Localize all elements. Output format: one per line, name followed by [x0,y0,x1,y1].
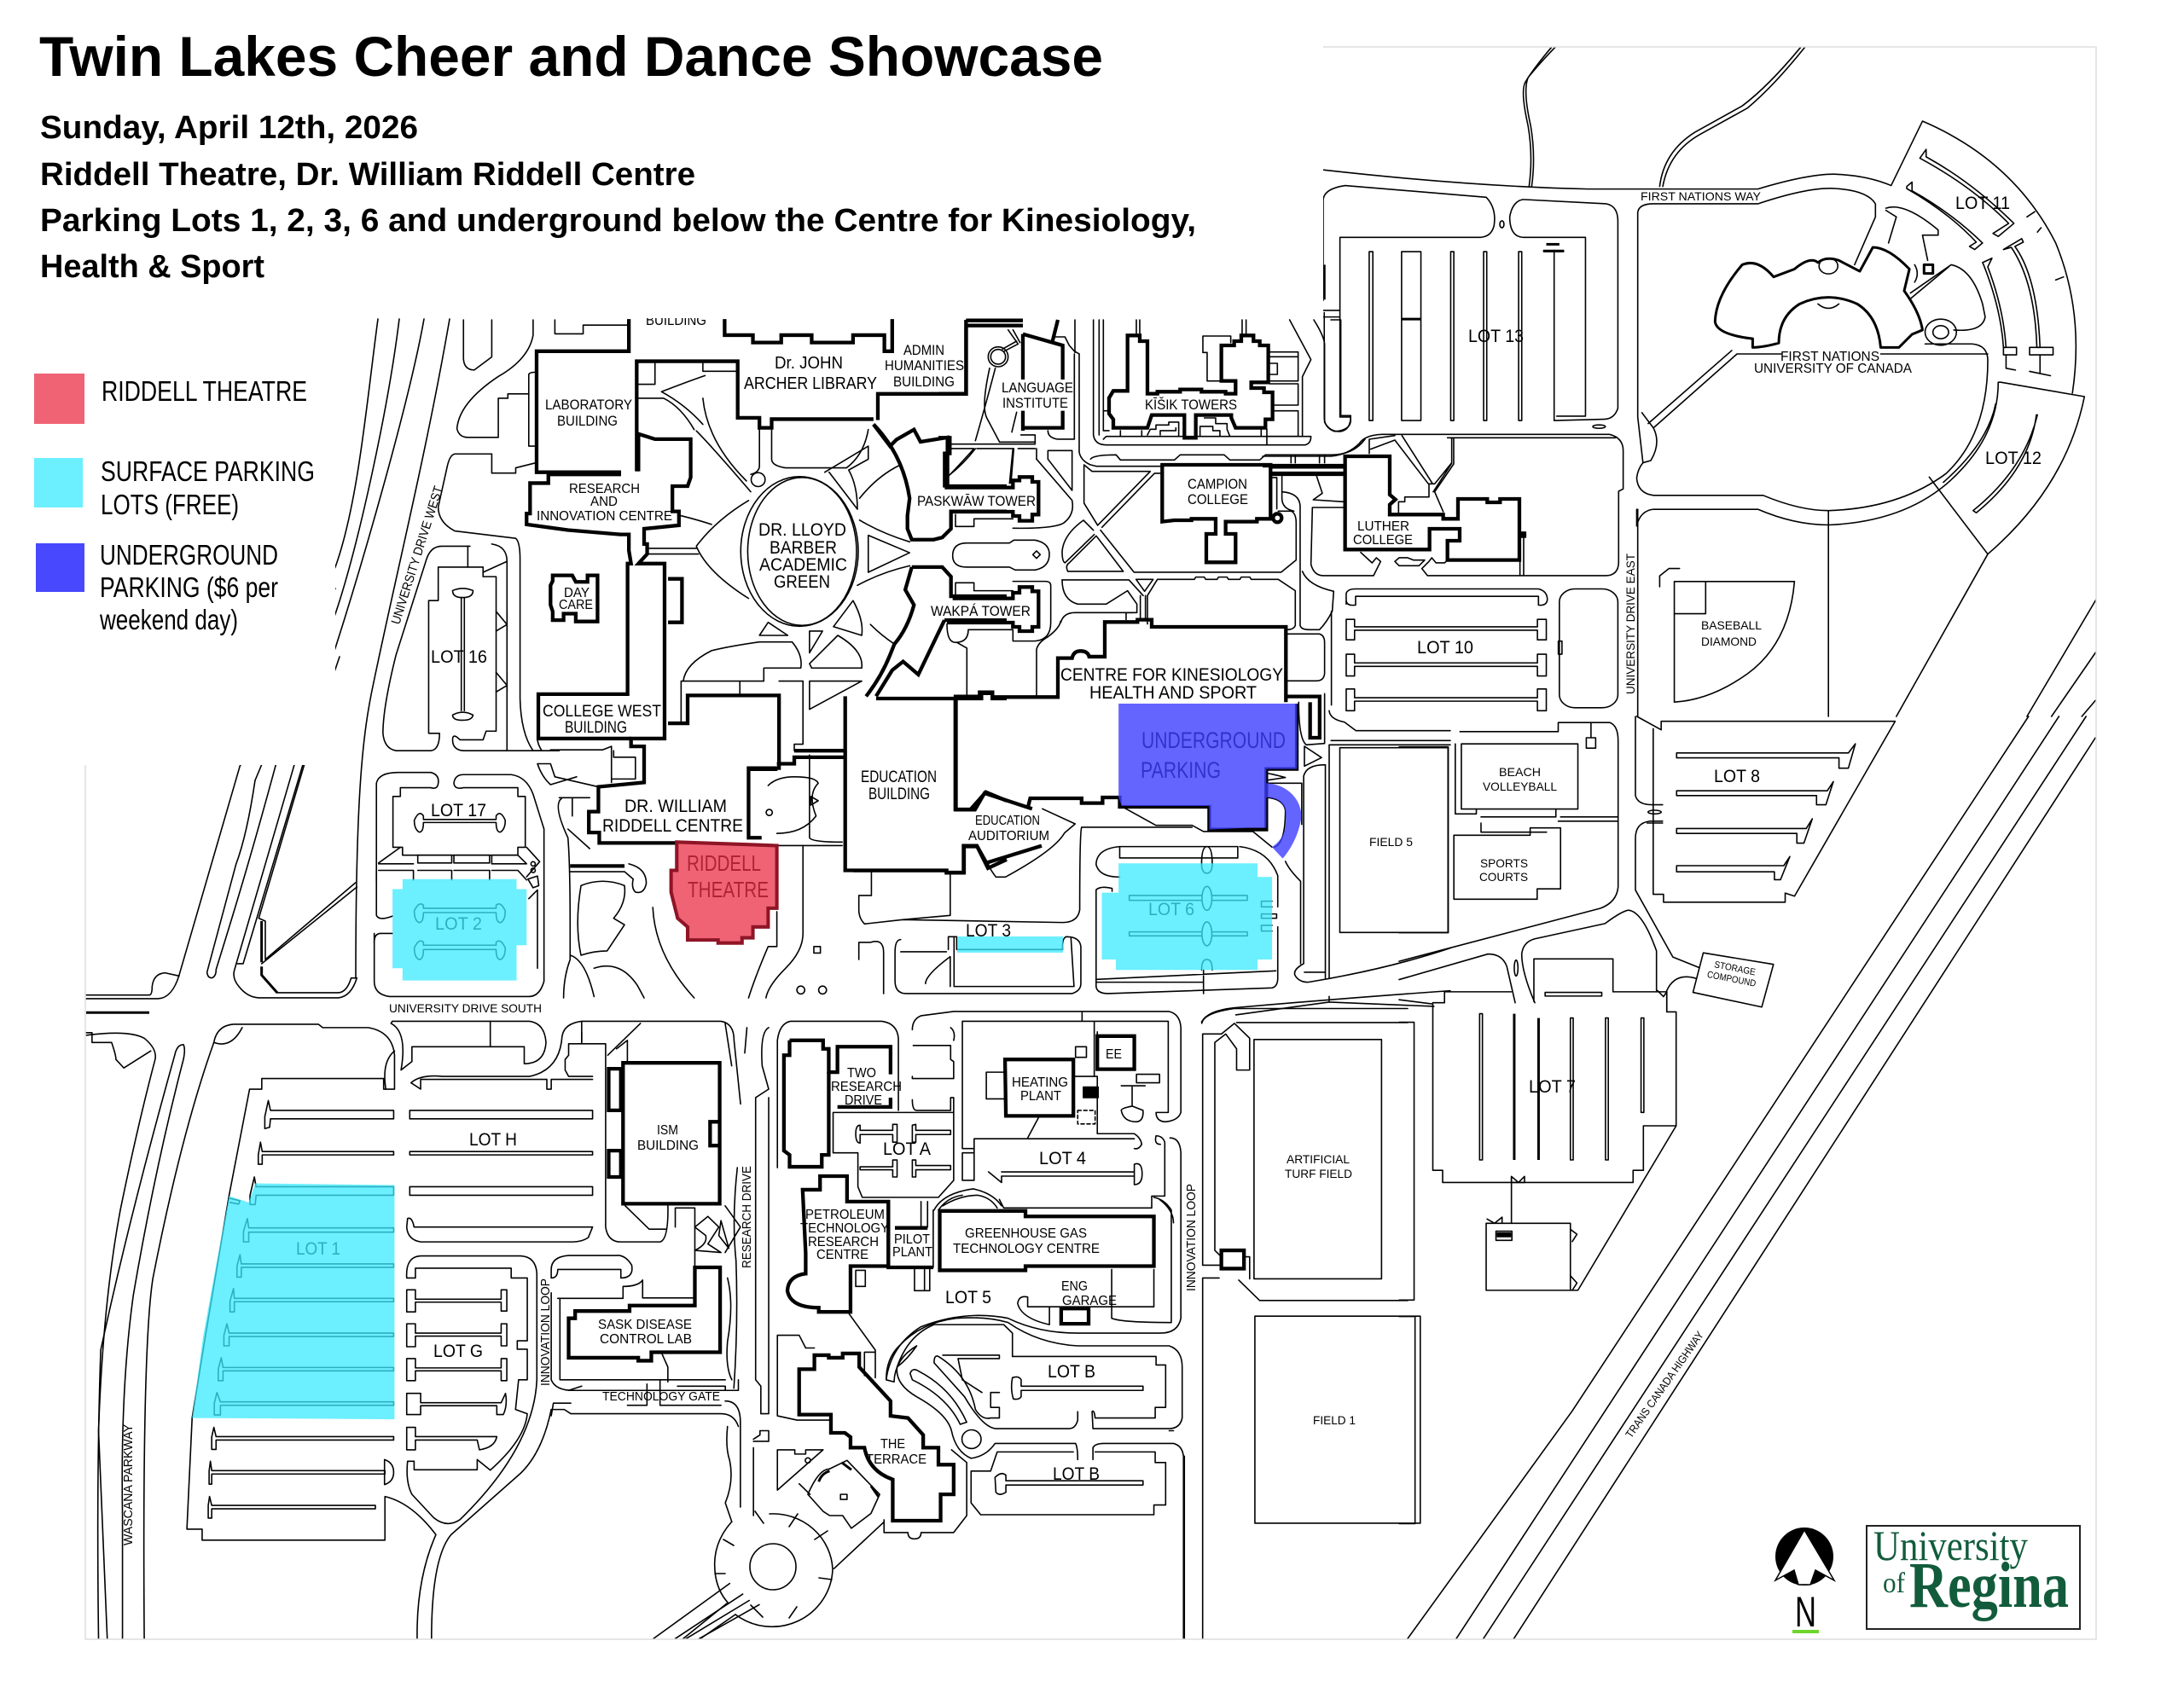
label: Greenhouse Gas Technology Centre: TECHNOLOGY CENTRE [953,1242,1100,1256]
Lot B north [886,1318,1182,1459]
label: Admin Humanities Building: BUILDING [893,374,955,390]
label: Pilot Plant: PLANT [892,1245,932,1260]
Lot 13 [1323,186,1495,432]
Lot 12 [1929,382,2084,554]
Two Research Drive [790,1041,891,1107]
label: Admin Humanities Building: HUMANITIES [885,357,964,374]
Lot 11 [1920,149,2014,236]
label: Trans Canada Highway: TRANS CANADA HIGHWAY [1623,1329,1706,1441]
Lot 17 and Lot 2 roads [375,773,544,996]
label: Eng Garage: GARAGE [1062,1294,1117,1308]
label: Language Institute: LANGUAGE [1002,380,1073,396]
label: College West Building: BUILDING [565,719,627,737]
label: Lot B north: LOT B [1048,1362,1095,1382]
label: Lot 6: LOT 6 [1148,900,1194,919]
legend: surface parking: LOTS (FREE) [101,489,239,520]
label: Lot 1: LOT 1 [296,1239,340,1259]
label: Education Building: BUILDING [868,786,930,803]
Lot A [834,1046,954,1197]
Paskwaw Tower [944,477,1038,521]
label: Lot G: LOT G [433,1342,483,1361]
label: Research and Innovation Centre: AND [590,495,618,509]
label: University Drive South: UNIVERSITY DRIVE SOUTH [389,1001,542,1015]
Lot 4 [962,1139,1135,1180]
label: University Drive West: UNIVERSITY DRIVE WEST [389,484,446,626]
Lot 3 roads [895,936,1081,994]
label: Campion College: CAMPION [1188,476,1247,492]
label: Two Research Drive: TWO [847,1066,876,1081]
south-east: Lot 8, Lot 7, sports courts, highway [1399,716,2095,1638]
Luther College [1263,434,1623,576]
legend: underground parking [36,539,278,635]
research drive lanes [756,1028,769,1414]
label: Research and Innovation Centre: RESEARCH [569,482,640,496]
Pilot Plant [888,1203,933,1267]
title block [39,25,1196,285]
label: Petroleum Technology Research Centre: RESEARCH [808,1235,879,1249]
label: Artificial Turf Field: TURF FIELD [1285,1167,1352,1180]
Centre for Kinesiology outline [956,620,1286,702]
label: Dr. William Riddell Centre: DR. WILLIAM [624,797,727,816]
label: Building top: BUILDING [646,312,706,328]
label: Centre for Kinesiology: CENTRE FOR KINESIOLOGY [1060,665,1283,685]
parking information: Health & Sport [40,249,264,285]
label: Sask Disease Control Lab: SASK DISEASE [598,1318,692,1332]
ISM Building [623,1063,720,1203]
label: Education Auditorium: EDUCATION [975,814,1040,828]
label: Baseball Diamond: DIAMOND [1701,635,1757,648]
label: Field 5: FIELD 5 [1369,835,1413,849]
Lot G [407,1256,537,1523]
label: Dr. John Archer Library: ARCHER LIBRARY [744,374,877,393]
storage compound [1693,953,1774,1007]
roundabout [682,1511,833,1639]
label: EE: EE [1106,1047,1122,1062]
baseball diamond [1675,582,1794,702]
label: Lot 17: LOT 17 [431,801,486,820]
legend: surface parking: SURFACE PARKING [101,455,315,487]
label: Petroleum Technology Research Centre: CENTRE [816,1248,868,1262]
label: University Drive East: UNIVERSITY DRIVE EAST [1623,554,1637,694]
Petroleum Technology Research Centre [787,1176,888,1312]
label: Paskwaw Tower: PASKWĀW TOWER [917,493,1036,509]
Greenhouse Gas Technology Centre [940,1211,1154,1270]
label: Baseball Diamond: BASEBALL [1701,618,1762,632]
Lot 1 boundary [187,1024,436,1638]
label: Storage Compound: COMPOUND [1706,970,1757,989]
label: Wakpa Tower: WAKPÁ TOWER [931,603,1031,619]
label: College West Building: COLLEGE WEST [543,703,661,721]
label: Underground Parking: PARKING [1141,757,1221,783]
auditorium [988,809,1075,877]
label: Eng Garage: ENG [1061,1279,1088,1294]
label: Beach Volleyball: VOLLEYBALL [1483,780,1557,793]
label: Sask Disease Control Lab: CONTROL LAB [600,1332,692,1347]
University of Regina logo: of [1883,1568,1906,1599]
label: Two Research Drive: RESEARCH [831,1080,902,1094]
Lot 8 [1637,716,1895,902]
title: Twin Lakes Cheer and Dance Showcase [39,25,1103,88]
map labels [121,189,2042,1545]
label: Day Care: CARE [559,598,593,612]
label: Wascana Parkway: WASCANA PARKWAY [121,1424,136,1545]
Language Institute [938,320,1063,431]
label: Lot B south: LOT B [1053,1464,1100,1484]
label: The Terrace: TERRACE [866,1452,926,1467]
label: Two Research Drive: DRIVE [845,1093,882,1108]
Wakpa Tower [947,587,1038,631]
University of Regina logo: University [1873,1522,2028,1569]
legend: Riddell Theatre: RIDDELL THEATRE [102,375,307,407]
Sask Disease Control Lab [569,1267,720,1360]
Lot H [411,1021,741,1104]
legend: Riddell Theatre [34,374,307,424]
label: Dr. John Archer Library: Dr. JOHN [775,354,843,373]
label: Heating Plant: HEATING [1012,1075,1068,1090]
highlight: Lot 6 [1101,863,1272,970]
Campion College [1162,465,1270,562]
label: Riddell Theatre: THEATRE [688,877,769,902]
label: Academic Green: BARBER [770,538,837,558]
label: Academic Green: ACADEMIC [759,555,847,575]
label: Luther College: LUTHER [1357,519,1409,534]
icon: north arrow [1775,1528,1834,1636]
label: Storage Compound: STORAGE [1713,959,1757,977]
Lot 16 [439,454,560,751]
label: Lot 2: LOT 2 [435,914,482,934]
label: Lot 5: LOT 5 [945,1288,991,1307]
label: Field 1: FIELD 1 [1313,1413,1356,1427]
thin roads near Laboratory [463,320,491,370]
label: Research and Innovation Centre: INNOVATION CENTRE [537,509,672,524]
label: Luther College: COLLEGE [1353,533,1413,548]
label: Lot 10: LOT 10 [1417,638,1473,658]
University of Regina logo: Regina [1909,1550,2069,1621]
legend [34,374,315,635]
label: Research Drive: RESEARCH DRIVE [740,1166,754,1268]
south-central: research buildings, Lot A, 4, 5, B, The Terrace [725,1008,1420,1638]
label: Admin Humanities Building: ADMIN [903,342,944,358]
label: Underground Parking: UNDERGROUND [1141,728,1286,753]
label: Campion College: COLLEGE [1188,491,1248,507]
EE building [1097,1036,1135,1070]
label: Petroleum Technology Research Centre: TECHNOLOGY [800,1221,889,1236]
label: Laboratory Building: BUILDING [557,413,618,429]
label: Language Institute: INSTITUTE [1002,395,1068,411]
label: Sports Courts: COURTS [1479,870,1528,884]
label: Day Care: DAY [564,586,590,600]
southwest intersection [86,765,357,1012]
label: Technology Gate: TECHNOLOGY GATE [602,1389,720,1404]
label: Lot 3: LOT 3 [966,921,1011,941]
parking information: Parking Lots 1, 2, 3, 6 and underground below the Centre for Kinesiology, [40,203,1196,239]
label: First Nations University of Canada: UNIVERSITY OF CANADA [1754,362,1912,376]
venue: Riddell Theatre, Dr. William Riddell Centre [40,157,695,193]
label: Greenhouse Gas Technology Centre: GREENHOUSE GAS [965,1226,1087,1241]
Riddell grounds [558,798,570,998]
education, auditorium, Lot 3, Lot 6 and Field 5 [853,693,1450,1022]
label: Heating Plant: PLANT [1020,1089,1061,1104]
academic green [741,477,858,626]
Heating Plant [1005,1059,1073,1116]
label: Lot 11: LOT 11 [1955,194,2010,213]
Lot 7 [1522,954,1535,1003]
The Terrace [799,1354,954,1521]
label: Lot A: LOT A [883,1139,931,1159]
legend: surface parking [34,455,315,520]
label: Innovation Loop west: INNOVATION LOOP [538,1278,553,1386]
north-east: Lot 13, First Nations University, Lot 11, 12, 10, baseball diamond [1323,47,2096,716]
icon: north arrow: N [1795,1588,1816,1636]
label: ISM Building: ISM [657,1123,678,1138]
label: Lot 13: LOT 13 [1468,327,1524,346]
First Nations University building [1715,247,1922,347]
label: Sports Courts: SPORTS [1480,856,1528,870]
University of Regina logo [1867,1522,2080,1629]
label: Riddell Theatre: RIDDELL [687,850,761,876]
label: Pilot Plant: PILOT [894,1232,930,1247]
legend: underground parking: UNDERGROUND [100,539,278,571]
label: Lot 8: LOT 8 [1714,767,1760,786]
sports courts [1461,744,1578,809]
label: Academic Green: GREEN [774,572,830,592]
highlight: Riddell Theatre [671,842,777,943]
label: Centre for Kinesiology: HEALTH AND SPORT [1089,683,1257,703]
label: Dr. William Riddell Centre: RIDDELL CENTRE [602,816,743,836]
Lot 6 roads [1119,847,1238,858]
label: First Nations University of Canada: FIRST NATIONS [1780,350,1879,364]
label: Lot 16: LOT 16 [431,647,487,667]
highlight: Lot 3 [957,936,1063,953]
label: Lot H: LOT H [469,1130,517,1150]
event date: Sunday, April 12th, 2026 [40,110,418,146]
Lot B south [1093,1443,1183,1638]
label: Petroleum Technology Research Centre: PETROLEUM [805,1208,885,1222]
label: Education Auditorium: AUDITORIUM [968,829,1049,844]
Kisik Towers [1109,335,1273,438]
label: The Terrace: THE [880,1437,905,1452]
label: Innovation Loop east: INNOVATION LOOP [1184,1184,1199,1291]
Eng Garage [1018,1269,1154,1325]
label: Lot 4: LOT 4 [1039,1149,1086,1168]
Lot 1 medians [264,1100,393,1128]
north-west campus: buildings and Lot 16, 17, 2 roads [375,319,1007,998]
Terrace grounds and west garden [777,1336,831,1420]
label: Beach Volleyball: BEACH [1499,765,1541,779]
central north campus: towers, Campion College, Centre for Kinesiology [938,320,1365,705]
south-west: Lot 1, H, G, ISM and Sask Disease Control Lab [86,1021,759,1638]
legend: underground parking: weekend day) [99,604,238,635]
Petroleum surroundings and Pilot Plant area [849,1314,875,1377]
label: Education Building: EDUCATION [861,768,937,786]
highlight: Lot 2 [392,879,526,981]
Field 5 [1339,748,1448,932]
west and Wascana roads [241,319,450,978]
label: Lot 7: LOT 7 [1529,1077,1576,1097]
legend: underground parking: PARKING ($6 per [100,571,278,603]
label: First Nations Way: FIRST NATIONS WAY [1641,189,1762,203]
highlight: Underground parking [1118,704,1301,859]
east road and Artificial Turf [1202,1008,1408,1023]
label: Academic Green: DR. LLOYD [758,520,846,540]
highlight: Lot 1 [192,1183,394,1419]
label: Lot 12: LOT 12 [1985,449,2042,468]
label: Laboratory Building: LABORATORY [545,397,632,413]
label: Artificial Turf Field: ARTIFICIAL [1287,1152,1350,1166]
highlighted areas [192,704,1301,1419]
Laboratory, Research and College West buildings [526,319,1007,872]
Lot 10 [1346,589,1548,606]
label: ISM Building: BUILDING [637,1139,699,1153]
label: Kisik Towers: KĪŠIK TOWERS [1145,397,1237,413]
